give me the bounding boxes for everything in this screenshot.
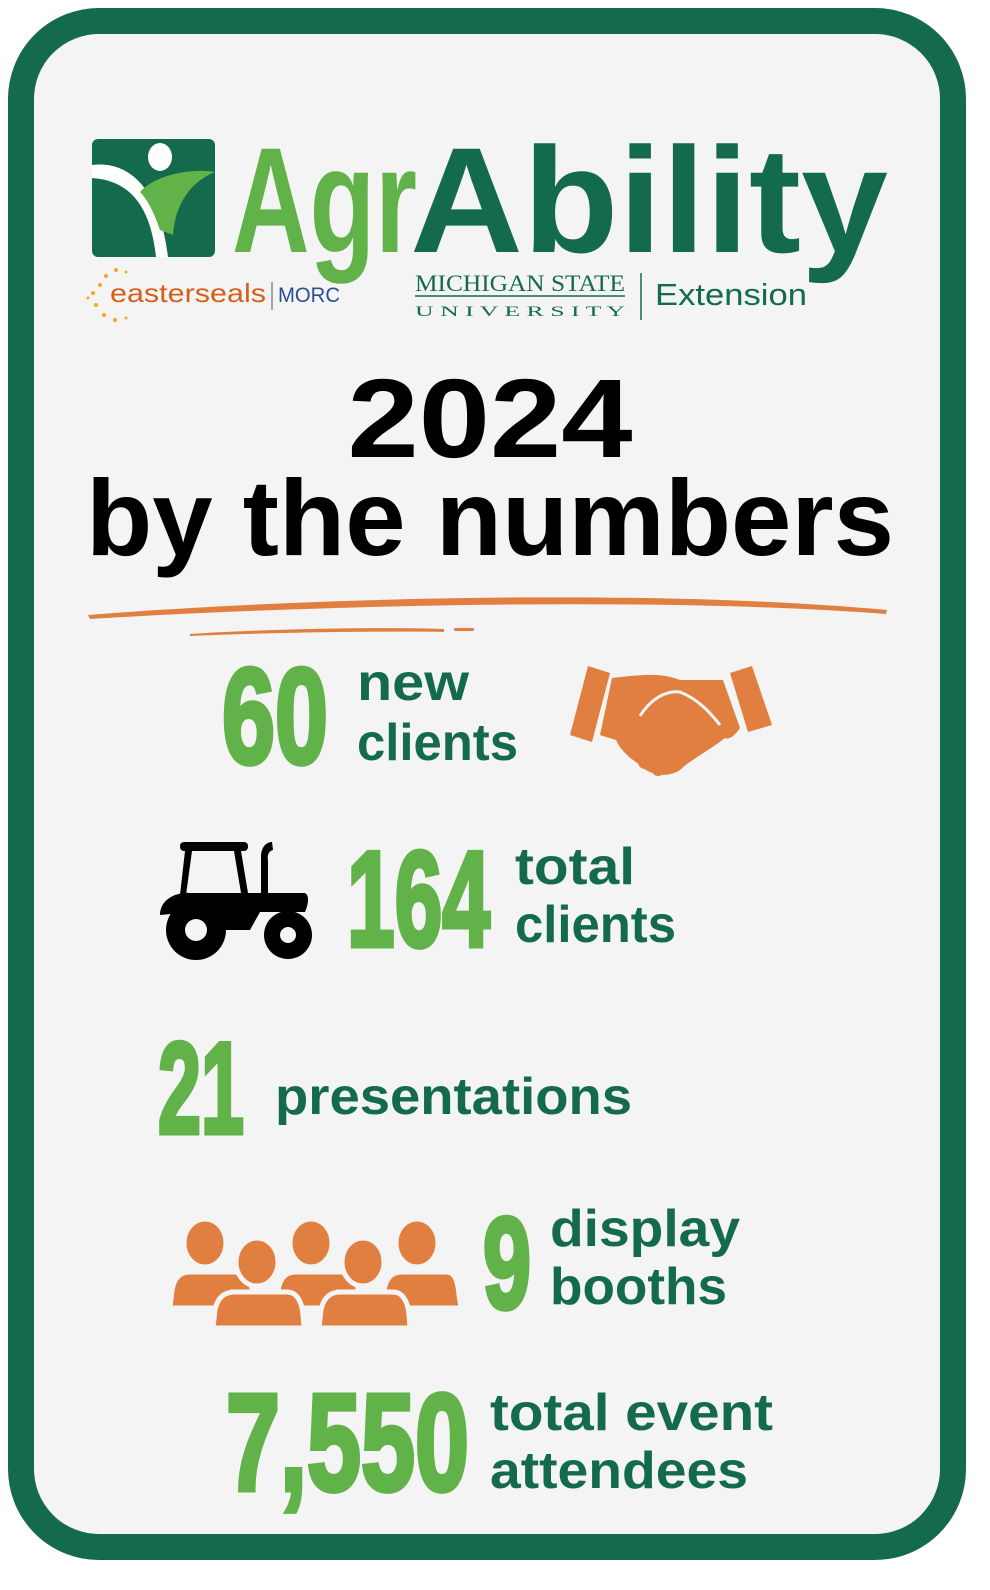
stat: 164 total clients <box>347 823 676 975</box>
icon: tractor <box>160 842 312 960</box>
stat: 164 total clients: 164 <box>347 823 490 975</box>
stat: 60 new clients: new <box>357 654 470 712</box>
stat: 7,550 total event attendees: attendees <box>490 1442 748 1500</box>
decoration: orange underline <box>88 597 887 636</box>
logo: AgrAbility <box>86 116 888 322</box>
stat: 9 display booths <box>483 1190 740 1336</box>
title: 2024: 2024 <box>348 356 632 481</box>
stat: 60 new clients <box>222 640 518 792</box>
icon: handshake <box>570 666 772 776</box>
icon: agrability square <box>92 139 215 257</box>
logo text: Ability: Ability <box>410 116 888 284</box>
stat: 7,550 total event attendees: total event <box>490 1384 773 1442</box>
stat: 21 presentations: presentations <box>275 1068 632 1126</box>
stat: 21 presentations <box>158 1015 632 1161</box>
logo text: Agr: Agr <box>232 116 417 284</box>
logo: Michigan State University Extension: MICHIGAN STATE <box>415 271 625 296</box>
stat: 9 display booths: display <box>550 1200 740 1258</box>
stat: 21 presentations: 21 <box>158 1015 244 1161</box>
title: by the numbers: by the numbers <box>86 457 894 578</box>
logo: easterseals MORC: easterseals <box>110 278 266 308</box>
stat: 7,550 total event attendees <box>226 1366 773 1520</box>
icon: group of people <box>170 1219 461 1328</box>
stat: 60 new clients: 60 <box>222 640 328 792</box>
stat: 9 display booths: booths <box>550 1258 727 1316</box>
logo: Michigan State University Extension <box>415 271 807 320</box>
logo: Michigan State University Extension: Extension <box>655 277 807 312</box>
stat: 60 new clients: clients <box>357 714 518 772</box>
logo: easterseals MORC: MORC <box>278 284 340 307</box>
logo: Michigan State University Extension: U N I V E R S I T Y <box>415 304 625 320</box>
stat: 9 display booths: 9 <box>483 1190 531 1336</box>
stat: 164 total clients: clients <box>515 896 676 954</box>
logo: easterseals MORC <box>86 268 340 322</box>
stat: 164 total clients: total <box>515 838 635 896</box>
stat: 7,550 total event attendees: 7,550 <box>226 1366 469 1520</box>
